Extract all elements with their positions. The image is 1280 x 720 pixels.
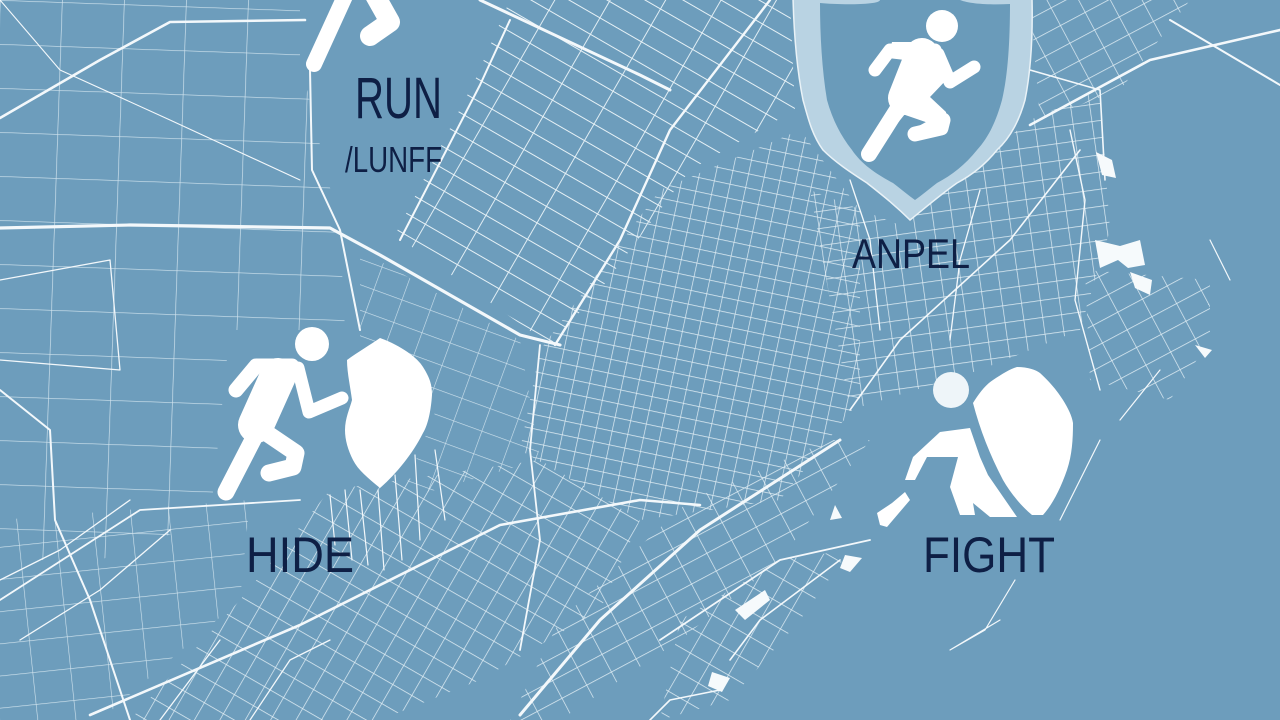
runner figure [866,10,974,160]
icon: runner leg (top left) [314,0,390,64]
icon: hide runner with shield [226,327,432,492]
coastal fragments [708,152,1212,692]
text: garbled subtitle: /LUNFF [345,139,442,180]
heading: FIGHT: FIGHT [923,527,1055,583]
icon: fight figure with shield [877,367,1073,527]
heading: RUN: RUN [355,66,442,131]
shield inner [820,0,1010,200]
shield outer band [793,0,1032,220]
heading: HIDE: HIDE [246,527,354,583]
heading: ANPEL: ANPEL [852,230,970,277]
icon: shield with runner [793,0,1032,220]
